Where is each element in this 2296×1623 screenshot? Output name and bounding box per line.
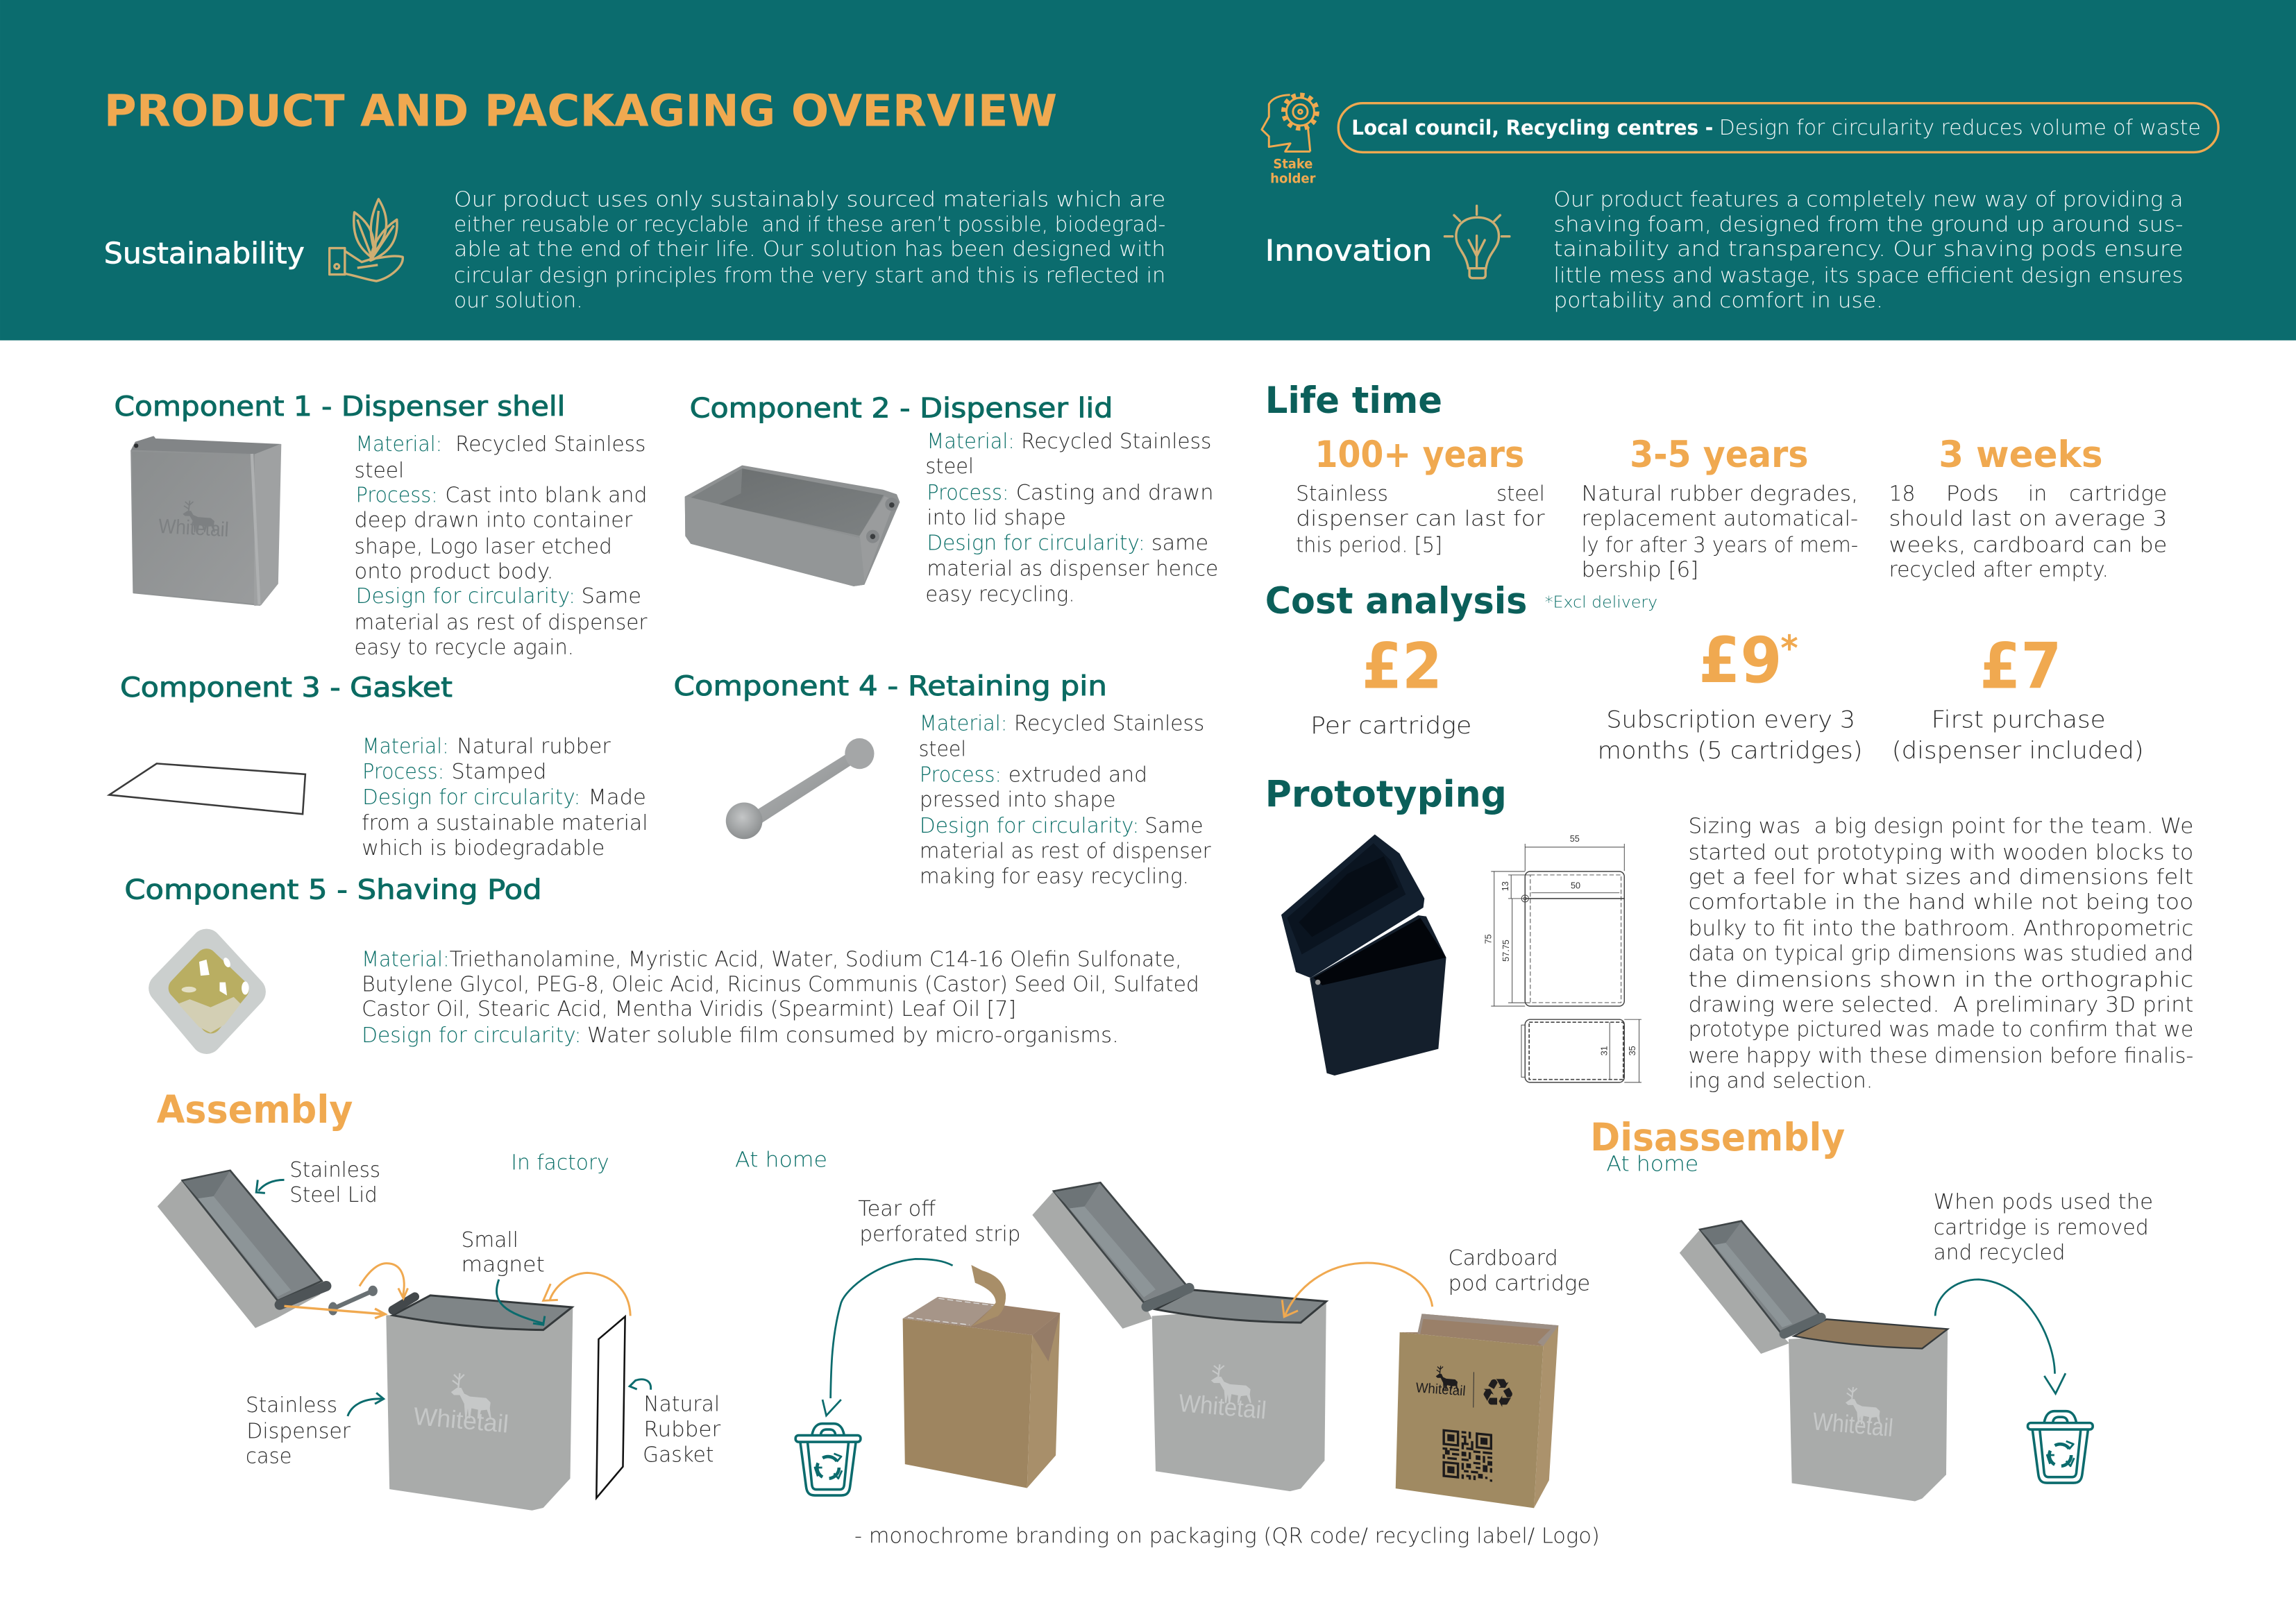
QR code: [1442, 1429, 1492, 1482]
description: onto product body.: [355, 559, 553, 584]
stakeholder label: Stake: [1273, 157, 1312, 172]
innovation block: [1265, 187, 2184, 313]
illustration: open dispenser with used cartridge: Whitetail: [1812, 1407, 1894, 1442]
label: when pods used: [1934, 1190, 2153, 1265]
description: Design for circularity:: [362, 785, 580, 810]
description: [362, 947, 1199, 1048]
sustainability paragraph: able at the end of their life. Our solution has been designed with: [454, 237, 1165, 262]
arrow: cartridge into dispenser: [1282, 1263, 1433, 1317]
description: Sizing was a big design point for the team. We: [1688, 814, 2193, 838]
innovation heading: Innovation: [1265, 234, 1432, 268]
arrows: assembly orange: [285, 1264, 630, 1318]
technical drawing: 75: [1484, 934, 1494, 944]
label: stainless dispenser case: case: [246, 1444, 292, 1468]
description: Recycled Stainless: [455, 432, 645, 457]
description: shape, Logo laser etched: [355, 534, 612, 559]
column: pods life: Pods: [1946, 482, 1999, 507]
illustration: cardboard pod cartridge: [1396, 1314, 1558, 1508]
heading: Component 2 - Dispenser lid: [690, 393, 1113, 424]
price: first purchase: [1892, 631, 2144, 764]
label: natural rubber gasket: Gasket: [643, 1443, 714, 1468]
description: started out prototyping with wooden blocks to: [1688, 840, 2193, 865]
description: Process:: [356, 484, 438, 508]
description: Process:: [927, 481, 1009, 505]
panel: component 3 gasket: [109, 672, 648, 860]
logo on cartridge: [1415, 1366, 1516, 1416]
description: Material:: [920, 712, 1007, 736]
arrow: cartridge to bin: [1935, 1280, 2066, 1393]
description: the dimensions shown in the orthographic: [1688, 968, 2193, 992]
stakeholder label: [1270, 157, 1316, 187]
description: prototype pictured was made to confirm that we: [1688, 1018, 2193, 1042]
description: easy recycling.: [925, 583, 1075, 607]
technical drawing: 13: [1501, 881, 1510, 891]
heading: Disassembly: [1590, 1115, 1845, 1159]
price: per cartridge: [1310, 631, 1471, 739]
description: Cast into blank and: [445, 484, 647, 508]
sustainability block: [104, 187, 1165, 313]
description: ing and selection.: [1688, 1069, 1873, 1093]
column: gasket life: replacement automatical-: [1581, 507, 1858, 531]
panel: component 1 dispenser shell: [115, 391, 648, 660]
description: Design for circularity:: [356, 584, 575, 609]
column: dispenser life: this period. [5]: [1296, 533, 1442, 557]
stakeholder pill: Local council, Recycling centres -: [1351, 116, 1713, 139]
illustration: cardboard box with strip: [903, 1265, 1060, 1488]
sub-heading: at home: At home: [1606, 1153, 1698, 1177]
innovation paragraph: [1553, 187, 2184, 313]
column: dispenser life: steel: [1496, 482, 1545, 507]
description: making for easy recycling.: [920, 865, 1189, 889]
column: dispenser life: [1296, 434, 1545, 557]
technical drawing: 50: [1571, 881, 1580, 891]
description: same: [1151, 532, 1208, 556]
description: easy to recycle again.: [355, 636, 574, 660]
description: extruded and: [1008, 763, 1147, 788]
label: stainless dispenser case: [246, 1393, 351, 1468]
column: pods life: in: [2028, 482, 2047, 507]
description: Material:: [362, 947, 450, 971]
icon: recycling bin: [2027, 1411, 2093, 1483]
price: first purchase: £7: [1980, 631, 2061, 704]
sub-heading: at home: At home: [735, 1148, 827, 1172]
column: gasket life: Natural rubber degrades,: [1581, 482, 1858, 507]
heading: Assembly: [157, 1087, 353, 1132]
description: comfortable in the hand while not being too: [1688, 890, 2193, 915]
stakeholder block: [1262, 95, 2218, 187]
column: dispenser life: dispenser can last for: [1296, 507, 1545, 531]
price: per cartridge: £2: [1362, 631, 1442, 704]
illustration: gasket: [596, 1316, 625, 1498]
panel: assembly in factory: [157, 1087, 721, 1511]
image: lid: [686, 466, 899, 586]
icon: recycling bin: [795, 1424, 861, 1495]
description: Recycled Stainless: [1021, 430, 1211, 454]
description: Same: [1145, 814, 1204, 838]
description: Castor Oil, Stearic Acid, Mentha Viridis (Spearmint) Leaf Oil [7]: [362, 997, 1016, 1021]
icon: light bulb: [1444, 206, 1510, 278]
column: pods life: weeks, cardboard can be: [1889, 533, 2167, 557]
technical drawing: 31: [1599, 1046, 1609, 1055]
column: pods life: 3 weeks: [1939, 434, 2103, 476]
heading: Component 5 - Shaving Pod: [124, 874, 542, 906]
arrow: strip to bin: [822, 1259, 953, 1416]
description: drawing were selected. A preliminary 3D print: [1688, 993, 2193, 1017]
description: Design for circularity:: [927, 532, 1145, 556]
technical drawing: 55: [1570, 834, 1580, 844]
column: pods life: should last on average 3: [1889, 507, 2167, 531]
description: from a sustainable material: [362, 811, 648, 835]
image: gasket: [109, 763, 305, 814]
image: shell: [131, 437, 280, 605]
illustration: dispenser case: Whitetail: [412, 1402, 509, 1438]
heading: Cost analysis: [1265, 580, 1527, 622]
sustainability paragraph: either reusable or recyclable and if these aren’t possible, biodegrad-: [454, 212, 1165, 237]
price: first purchase: (dispenser included): [1892, 737, 2144, 764]
description: were happy with these dimension before finalis-: [1688, 1044, 2193, 1069]
panel: disassembly: [1590, 1115, 2153, 1501]
heading: Component 4 - Retaining pin: [673, 671, 1107, 702]
column: gasket life: [1581, 434, 1858, 582]
sustainability paragraph: Our product uses only sustainably sourced materials which are: [454, 187, 1165, 212]
description: Material:: [356, 432, 442, 457]
sustainability paragraph: our solution.: [454, 289, 583, 313]
description: material as rest of dispenser: [355, 611, 648, 635]
label: tear off strip: Tear off: [858, 1197, 936, 1221]
stakeholder pill: Design for circularity reduces volume of waste: [1719, 116, 2201, 140]
title: PRODUCT AND PACKAGING OVERVIEW: [104, 85, 1057, 136]
description: steel: [925, 454, 974, 479]
innovation paragraph: shaving foam, designed from the ground up around sus-: [1553, 212, 2184, 237]
description: bulky to fit into the bathroom. Anthropometric: [1688, 917, 2193, 941]
icon: hand holding leaves: [330, 199, 403, 281]
label: natural rubber gasket: Rubber: [643, 1418, 721, 1442]
panel: prototyping: [1265, 773, 2193, 1093]
innovation paragraph: little mess and wastage, its space efficient design ensures: [1553, 264, 2184, 288]
description: pressed into shape: [920, 788, 1116, 812]
label: stainless dispenser case: Dispenser: [246, 1419, 351, 1443]
description: Stamped: [451, 760, 547, 784]
price: subscription: £9: [1698, 624, 1782, 697]
technical drawing: 57.75: [1501, 940, 1511, 962]
label: small magnet: [462, 1228, 545, 1277]
column: pods life: cartridge: [2069, 482, 2167, 507]
column: gasket life: ly for after 3 years of mem-: [1581, 533, 1858, 557]
description: Water soluble film consumed by micro-organisms.: [587, 1023, 1119, 1048]
description: [1688, 814, 2193, 1093]
illustration: open dispenser with used cartridge: [1680, 1221, 1948, 1501]
label: when pods used: and recycled: [1934, 1241, 2066, 1265]
label: small magnet: Small: [462, 1228, 518, 1252]
price: subscription: *: [1780, 627, 1798, 668]
sustainability heading: Sustainability: [104, 237, 305, 271]
description: Design for circularity:: [362, 1023, 582, 1048]
price: per cartridge: Per cartridge: [1310, 712, 1471, 739]
description: Made: [588, 785, 646, 810]
illustration: retaining pin: [328, 1286, 378, 1316]
image: shell: Whitetail: [158, 515, 229, 541]
label: cardboard pod cartridge: pod cartridge: [1448, 1271, 1590, 1295]
panel: life time: [1265, 380, 2167, 582]
description: deep drawn into container: [355, 508, 633, 532]
description: Butylene Glycol, PEG-8, Oleic Acid, Ricinus Communis (Castor) Seed Oil, Sulfated: [362, 972, 1199, 996]
description: [919, 712, 1211, 889]
panel: component 4 retaining pin: [673, 671, 1211, 889]
header band: [0, 0, 2296, 341]
label: small magnet: magnet: [462, 1252, 545, 1277]
innovation paragraph: Our product features a completely new way of providing a: [1553, 187, 2184, 212]
description: [362, 735, 648, 860]
description: material as dispenser hence: [927, 556, 1218, 581]
price: subscription: Subscription every 3: [1606, 706, 1855, 733]
label: when pods used: cartridge is removed: [1934, 1216, 2149, 1240]
label: tear off strip: [858, 1197, 1020, 1247]
description: material as rest of dispenser: [920, 839, 1211, 863]
illustration: dispenser with lid open: Whitetail: [1178, 1389, 1267, 1425]
image: pod: [164, 944, 251, 1039]
panel: component 2 dispenser lid: [686, 393, 1218, 607]
price: subscription: months (5 cartridges): [1598, 737, 1863, 764]
label: stainless steel lid: Steel Lid: [289, 1183, 378, 1207]
description: data on typical grip dimensions was studied and: [1688, 942, 2193, 966]
panel: component 5 shaving pod: [124, 874, 1199, 1048]
description: get a feel for what sizes and dimensions felt: [1688, 865, 2193, 890]
illustration: dispenser with lid open: [1032, 1182, 1326, 1491]
panel: cost analysis: [1265, 580, 2144, 764]
description: Material:: [362, 735, 449, 759]
description: [355, 432, 648, 660]
description: Same: [582, 584, 641, 609]
label: natural rubber gasket: Natural: [643, 1392, 720, 1416]
label: stainless steel lid: Stainless: [289, 1158, 380, 1182]
illustration: dispenser case: [386, 1295, 573, 1511]
column: dispenser life: 100+ years: [1315, 434, 1524, 476]
description: Material:: [927, 430, 1015, 454]
label: natural rubber gasket: [643, 1392, 721, 1468]
description: Recycled Stainless: [1014, 712, 1204, 736]
description: Natural rubber: [457, 735, 611, 759]
photo: 3D printed prototype: [1281, 835, 1446, 1076]
sustainability paragraph: circular design principles from the very start and this is reflected in: [454, 264, 1165, 288]
technical drawing: [1484, 834, 1641, 1082]
heading: Component 3 - Gasket: [120, 672, 453, 704]
stakeholder label: holder: [1270, 171, 1316, 187]
heading: Life time: [1265, 380, 1442, 422]
innovation paragraph: portability and comfort in use.: [1553, 289, 1883, 313]
arrows: assembly teal: [256, 1180, 651, 1416]
column: gasket life: 3-5 years: [1630, 434, 1808, 476]
label: tear off strip: perforated strip: [859, 1223, 1020, 1247]
description: Casting and drawn: [1016, 481, 1214, 505]
icon: head with gear: [1262, 95, 1317, 151]
label: when pods used: When pods used the: [1934, 1190, 2153, 1214]
technical drawing: 35: [1628, 1046, 1637, 1055]
column: pods life: 18: [1889, 482, 1915, 507]
column: gasket life: bership [6]: [1581, 558, 1698, 582]
logo on cartridge: ♻: [1480, 1370, 1516, 1416]
description: Process:: [920, 763, 1002, 788]
description: Design for circularity:: [920, 814, 1139, 838]
heading: Prototyping: [1265, 773, 1507, 815]
column: pods life: recycled after empty.: [1889, 558, 2109, 582]
description: into lid shape: [927, 506, 1066, 530]
label: stainless steel lid: [289, 1158, 380, 1207]
description: Triethanolamine, Myristic Acid, Water, Sodium C14-16 Olefin Sulfonate,: [450, 947, 1182, 971]
innovation paragraph: tainability and transparency. Our shaving pods ensure: [1553, 237, 2184, 262]
description: Process:: [362, 760, 444, 784]
label: cardboard pod cartridge: Cardboard: [1448, 1246, 1558, 1271]
price: subscription: [1598, 624, 1863, 764]
caption: monochrome branding: - monochrome branding on packaging (QR code/ recycling label/ Logo): [854, 1524, 1600, 1549]
description: steel: [919, 738, 966, 762]
heading: Component 1 - Dispenser shell: [115, 391, 565, 423]
panel: assembly at home: [735, 1148, 1600, 1549]
stakeholder pill: [1338, 103, 2218, 152]
label: cardboard pod cartridge: [1448, 1246, 1590, 1295]
column: pods life: [1889, 434, 2167, 582]
illustration: exploded lid: [158, 1171, 326, 1327]
sub-heading: in factory: In factory: [511, 1151, 609, 1175]
image: pin: [726, 738, 874, 839]
description: which is biodegradable: [362, 836, 605, 860]
sustainability paragraph: [454, 187, 1165, 313]
description: [925, 430, 1218, 607]
price: first purchase: First purchase: [1932, 706, 2106, 733]
description: steel: [355, 459, 404, 483]
logo on cartridge: Whitetail: [1415, 1380, 1466, 1399]
label: stainless dispenser case: Stainless: [246, 1393, 337, 1418]
note: excludes delivery: *Excl delivery: [1545, 593, 1657, 612]
column: dispenser life: Stainless: [1296, 482, 1388, 507]
